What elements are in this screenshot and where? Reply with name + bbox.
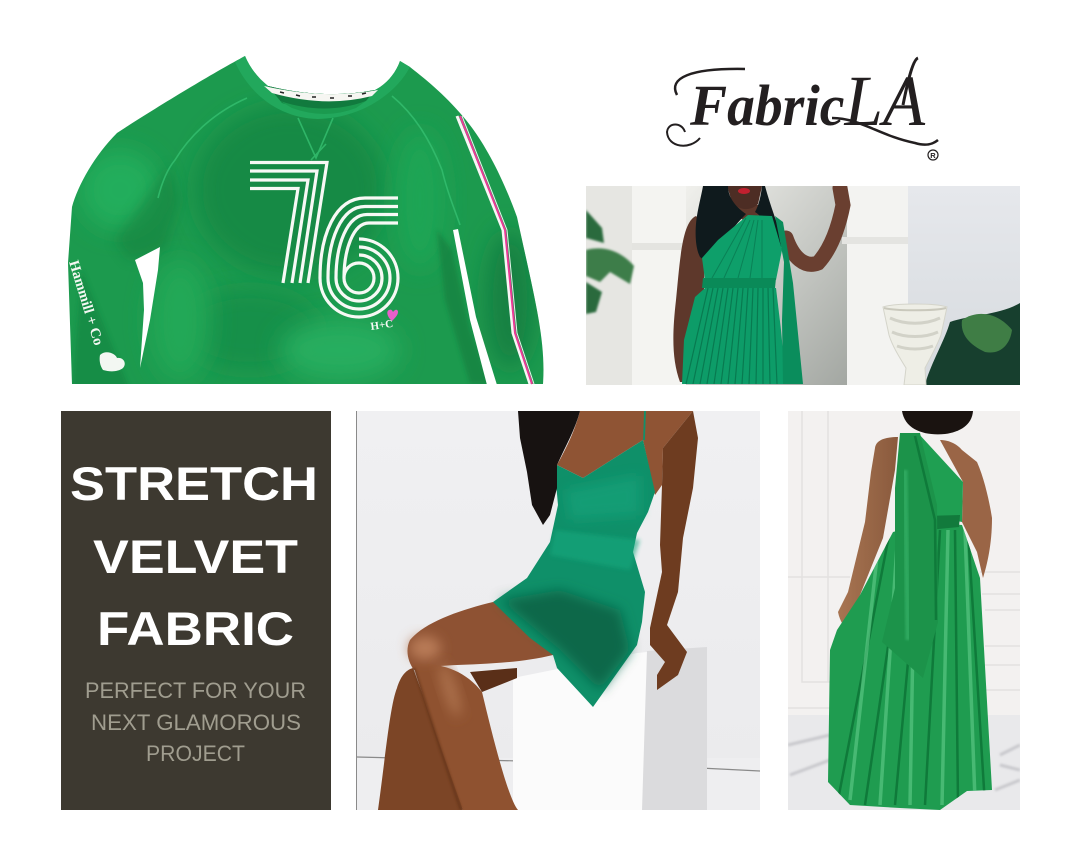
bodice gathers [712, 218, 762, 278]
sash [882, 433, 938, 678]
dress shading [500, 475, 640, 690]
panel: woman in pleated gown, back [788, 411, 1020, 810]
H+C mark with heart: H+C [370, 318, 394, 333]
heading: VELVET [93, 530, 298, 583]
raglan seams [158, 96, 460, 225]
urn [883, 304, 947, 385]
heading [70, 457, 318, 655]
hair [518, 411, 580, 525]
lips [738, 188, 750, 194]
hair [902, 411, 973, 434]
bodice [918, 433, 963, 522]
face [727, 186, 762, 209]
wall panel lines [788, 411, 1020, 708]
gown skirt [682, 288, 786, 384]
skirt pleats [838, 530, 985, 805]
velvet shading [72, 105, 535, 390]
logo: FabricLA [667, 58, 938, 160]
front shin [413, 664, 518, 810]
belt [925, 515, 960, 530]
sweatshirt body [68, 56, 543, 384]
panel: green velvet sweatshirt photo [65, 56, 543, 390]
logo flourishes [667, 58, 938, 146]
palm plant, left [586, 210, 634, 314]
subheading: NEXT GLAMOROUS [91, 710, 301, 735]
under thigh shadow [470, 668, 517, 692]
right arm and shoulder [940, 440, 992, 578]
studio background [357, 411, 760, 758]
subheading [85, 678, 306, 766]
gown skirt [828, 522, 992, 810]
subheading: PERFECT FOR YOUR [85, 678, 306, 703]
registered mark [928, 150, 938, 160]
heading: STRETCH [70, 457, 318, 510]
arm [650, 411, 698, 690]
neck [736, 205, 760, 220]
belt [702, 278, 776, 288]
registered mark: R [930, 151, 936, 160]
logo wordmark: FabricLA [689, 61, 926, 141]
sleeve stripes [457, 116, 534, 384]
pleats [686, 288, 777, 384]
floor [357, 758, 760, 810]
arm and hand raised [786, 188, 843, 264]
heading: FABRIC [97, 602, 294, 655]
number 76 graphic [250, 162, 398, 317]
shin edge shadow [414, 668, 461, 810]
H+C mark with heart [370, 310, 398, 333]
panel: title block [61, 411, 331, 810]
monstera plant, right [925, 303, 1020, 385]
gown bodice [702, 215, 782, 280]
front thigh [407, 602, 565, 670]
marble floor [788, 715, 1020, 810]
back leg [378, 668, 463, 810]
room background [586, 186, 632, 385]
subheading: PROJECT [146, 741, 245, 766]
infographic canvas [61, 56, 1020, 810]
chest and shoulders [557, 411, 693, 495]
left arm [838, 437, 898, 630]
collar [235, 56, 410, 119]
title background [61, 411, 331, 810]
sash [775, 216, 803, 384]
white block [513, 652, 647, 810]
upper left arm [673, 216, 705, 382]
dress strap [644, 411, 645, 440]
hair [696, 186, 784, 260]
wall [788, 411, 1020, 715]
sleeve text Hammill + Co: Hammill + Co [65, 258, 106, 347]
knee highlight [409, 636, 441, 660]
sleeve heart [100, 352, 125, 371]
panel: woman in satin mini dress seated [357, 411, 760, 810]
panel: woman in pleated green gown, front [586, 186, 1020, 385]
gaps between sleeves and body [135, 247, 160, 368]
photo left edge line [356, 411, 357, 810]
satin dress [493, 440, 655, 707]
